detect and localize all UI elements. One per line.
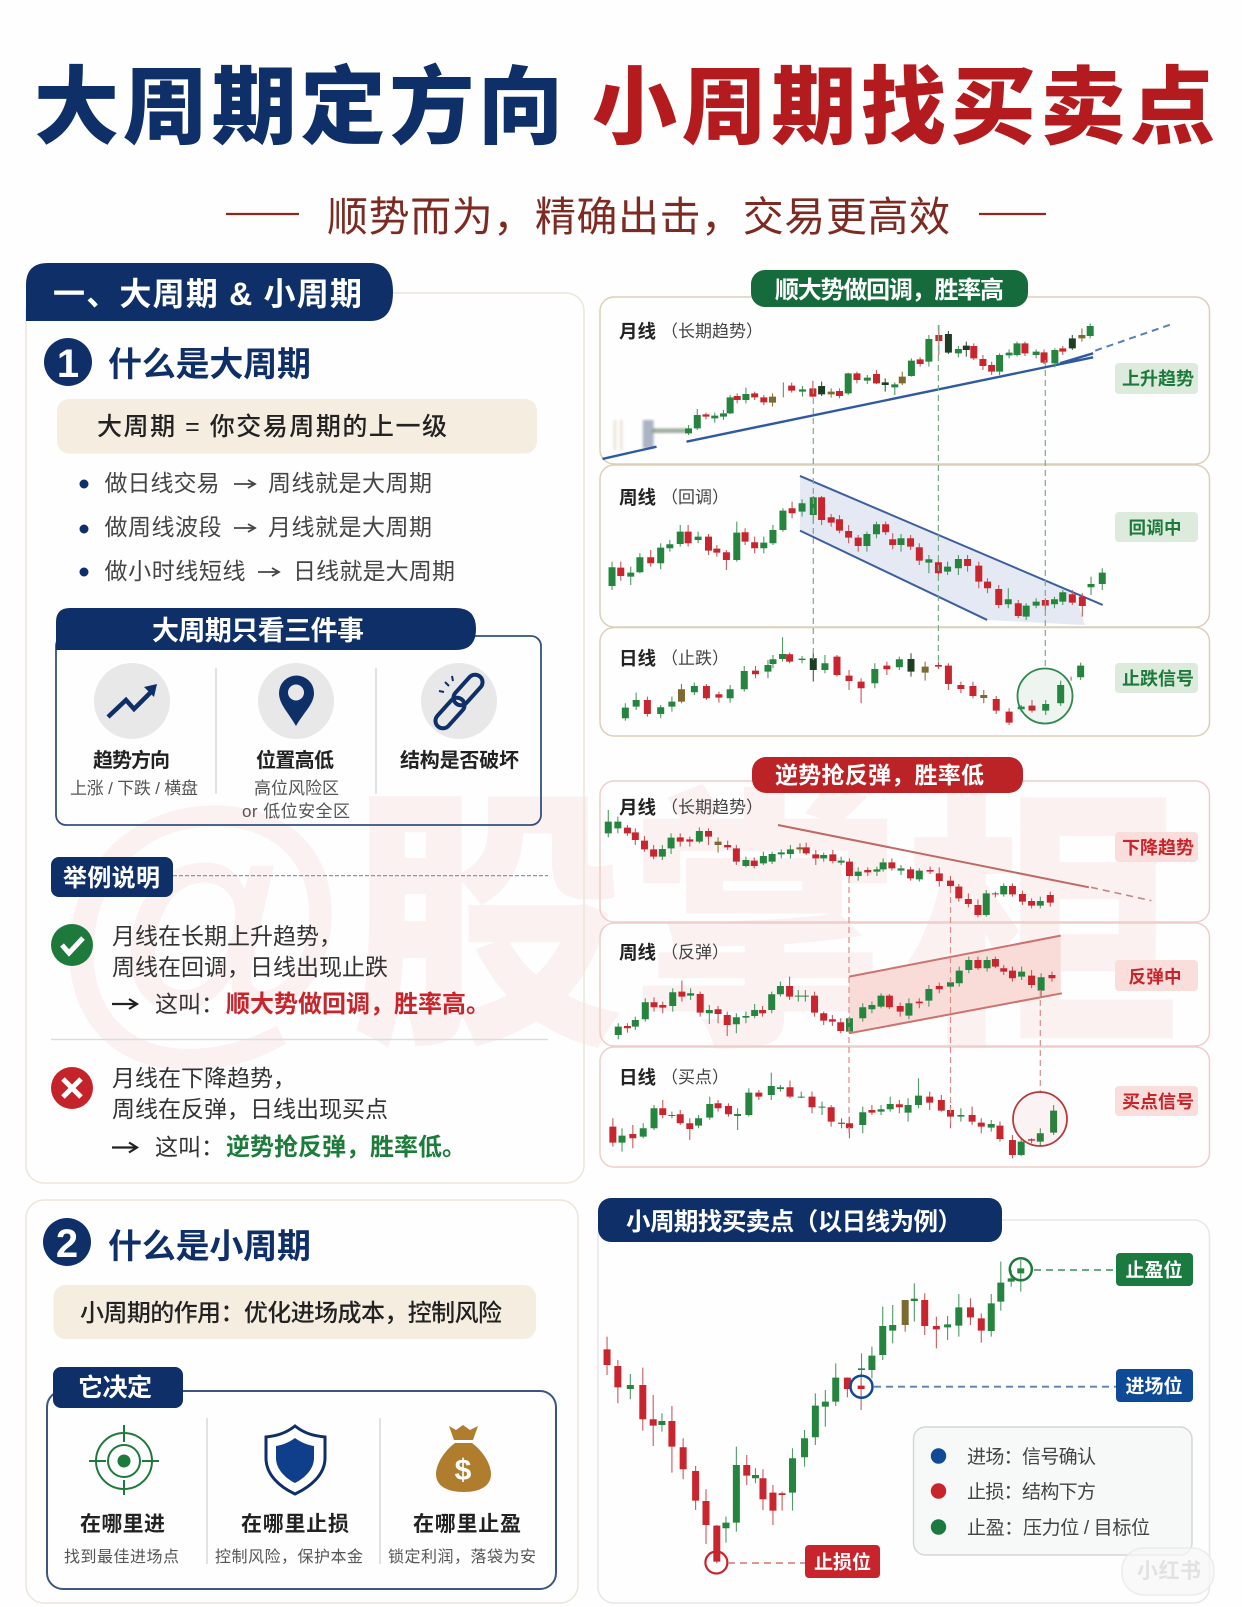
item: position: 高位风险区 [254, 779, 339, 798]
role box [54, 1285, 536, 1339]
labels: monthly: 月线 [619, 797, 656, 818]
bullet list: 月线就是大周期 [268, 514, 432, 540]
monthly downtrend chart [608, 810, 1151, 917]
chip: take profit: 止盈位 [1126, 1258, 1182, 1282]
item: entry: 找到最佳进场点 [64, 1548, 179, 1566]
marker: stop loss [705, 1552, 805, 1574]
item: stop loss: 控制风险，保护本金 [215, 1548, 363, 1566]
panel: section one 大周期 [26, 263, 584, 1183]
labels: weekly [619, 487, 729, 508]
panel group: against the trend [600, 757, 1210, 1167]
legend: 进场：信号确认 [967, 1446, 1096, 1468]
labels: daily [619, 648, 729, 669]
chip: stop loss: 止损位 [814, 1550, 871, 1574]
labels: weekly: 周线 [619, 942, 656, 963]
role box: 小周期的作用：优化进场成本，控制风险 [80, 1300, 502, 1327]
box tab [53, 1367, 183, 1408]
chip: uptrend [1115, 363, 1198, 394]
example: wrong [51, 1065, 466, 1161]
heading: 什么是大周期 [44, 338, 311, 386]
definition box [57, 399, 537, 454]
icon: shield [266, 1426, 325, 1494]
pill: 顺大势做回调: 顺大势做回调，胜率高 [775, 277, 1004, 304]
daily stop-fall chart [625, 637, 1081, 725]
bullet list: 日线就是大周期 [293, 558, 455, 584]
watermark: 股掌柜 [52, 746, 1180, 1087]
labels: weekly: 周线 [619, 487, 656, 508]
labels: monthly: 月线 [619, 321, 656, 342]
weekly pullback channel chart [612, 476, 1103, 625]
box header: 大周期只看三件事 [152, 616, 364, 646]
monthly uptrend chart [602, 323, 1172, 459]
heading: 什么是大周期: 1 [57, 342, 79, 386]
chip: rebound [1115, 960, 1198, 991]
icon: target [89, 1425, 159, 1495]
example: wrong: 逆势抢反弹，胜率低。 [226, 1133, 466, 1161]
vertical guide lines [813, 325, 1045, 668]
item: structure [400, 663, 519, 772]
labels: weekly: （回调） [661, 488, 729, 507]
item: take profit [388, 1513, 536, 1566]
chip: buy signal: 买点信号 [1122, 1092, 1194, 1112]
daily buy-point chart [613, 1073, 1054, 1158]
example: correct: 顺大势做回调，胜率高。 [226, 991, 490, 1018]
tab: examples [51, 857, 548, 897]
heading: 什么是大周期: 什么是大周期 [108, 346, 311, 384]
highlight circle: stop-fall [1018, 668, 1072, 724]
labels: weekly: （反弹） [661, 943, 729, 962]
item: take profit: 在哪里止盈 [413, 1513, 521, 1536]
chip: entry [1116, 1369, 1193, 1402]
pill: 逆势抢反弹: 逆势抢反弹，胜率低 [775, 762, 984, 788]
marker: entry [850, 1376, 1116, 1398]
chip: buy signal [1115, 1086, 1198, 1116]
item: position [242, 663, 350, 821]
chip: stop loss [805, 1545, 880, 1578]
box: decides [47, 1367, 556, 1589]
chip: rebound: 反弹中 [1128, 967, 1182, 987]
icon: money bag [436, 1425, 491, 1492]
labels: monthly: （长期趋势） [661, 322, 763, 341]
title: 小周期找买卖点 [592, 61, 1215, 156]
item: entry: 在哪里进 [80, 1513, 165, 1536]
chip: take profit [1116, 1253, 1193, 1286]
item: trend direction [70, 663, 198, 798]
definition box: 大周期 = 你交易周期的上一级 [97, 413, 447, 441]
bullet list [80, 470, 455, 584]
icon: money bag: $ [455, 1454, 472, 1487]
bullet list: 周线就是大周期 [268, 470, 432, 496]
main candlestick chart [607, 1260, 1021, 1563]
legend: 止损：结构下方 [967, 1481, 1096, 1503]
example: wrong: 周线在反弹，日线出现买点 [112, 1096, 388, 1122]
panel: section two 小周期 [26, 1200, 578, 1603]
bullet list: 做周线波段 [104, 514, 222, 540]
item: take profit: 锁定利润，落袋为安 [388, 1548, 536, 1566]
item: trend direction: 上涨 / 下跌 / 横盘 [70, 779, 198, 798]
pill: 顺大势做回调 [751, 270, 1028, 307]
box tab: 它决定 [78, 1374, 152, 1402]
chip: downtrend: 下降趋势 [1122, 838, 1194, 858]
heading: 什么是小周期 [43, 1218, 311, 1266]
marker: take profit [1010, 1258, 1116, 1280]
subtitle: 顺势而为，精确出击，交易更高效 [327, 194, 950, 240]
example: wrong: 这叫： [155, 1134, 224, 1160]
weekly rebound channel chart [618, 936, 1062, 1039]
highlight circle: buy point [1013, 1092, 1067, 1146]
chip: stop-fall: 止跌信号 [1122, 669, 1194, 689]
box: three things [56, 608, 541, 825]
item: entry [64, 1513, 179, 1566]
labels: daily [619, 1067, 729, 1088]
section header: 一、大周期 & 小周期 [53, 276, 362, 312]
watermark: 小红书: 小红书 [1137, 1560, 1201, 1583]
tab: examples: 举例说明 [63, 865, 160, 892]
labels: weekly [619, 942, 729, 963]
legend: 止盈：压力位 / 目标位 [967, 1517, 1150, 1539]
labels: monthly [619, 321, 763, 342]
labels: daily: （止跌） [661, 649, 729, 668]
title [34, 61, 1215, 156]
chip: downtrend [1115, 832, 1198, 862]
heading: 什么是小周期: 2 [56, 1222, 78, 1266]
chip: pullback: 回调中 [1128, 518, 1182, 538]
example: correct: 这叫： [155, 991, 224, 1017]
heading: 什么是小周期: 什么是小周期 [108, 1228, 311, 1266]
chip: pullback [1115, 512, 1198, 542]
legend [914, 1427, 1192, 1555]
example: correct: 周线在回调，日线出现止跌 [112, 954, 388, 980]
panel group: with the trend [600, 270, 1210, 736]
panel header [598, 1198, 1002, 1242]
labels: daily: 日线 [619, 1067, 656, 1088]
item: trend direction: 趋势方向 [93, 748, 170, 772]
panel header: 小周期找买卖点（以日线为例） [626, 1208, 962, 1236]
labels: daily: （买点） [661, 1068, 729, 1087]
item: position: or 低位安全区 [242, 802, 350, 821]
chip: uptrend: 上升趋势 [1122, 369, 1194, 389]
vertical guide lines [849, 877, 1040, 1133]
labels: monthly: （长期趋势） [661, 798, 763, 817]
item: stop loss [215, 1513, 363, 1566]
chip: entry: 进场位 [1126, 1374, 1182, 1398]
item: stop loss: 在哪里止损 [241, 1513, 349, 1536]
watermark: 小红书 [1122, 1548, 1214, 1595]
labels: daily: 日线 [619, 648, 656, 669]
pill: 逆势抢反弹 [752, 757, 1023, 793]
item: structure: 结构是否破坏 [400, 749, 519, 772]
box header [56, 608, 476, 650]
item: position: 位置高低 [256, 748, 334, 772]
labels: monthly [619, 797, 763, 818]
example: wrong: 月线在下降趋势， [112, 1065, 296, 1091]
title: 大周期定方向 [34, 61, 563, 156]
watermark: 股掌柜: @ [52, 746, 349, 1087]
panel: small-cycle trade points [598, 1198, 1210, 1603]
example: correct [51, 923, 490, 1018]
section header [26, 263, 393, 321]
bullet list: 做日线交易 [104, 470, 220, 496]
watermark: 股掌柜: 股掌柜 [350, 774, 1180, 1081]
bullet list: 做小时线短线 [104, 558, 246, 584]
example: correct: 月线在长期上升趋势， [112, 923, 342, 949]
chip: stop-fall [1115, 663, 1198, 693]
